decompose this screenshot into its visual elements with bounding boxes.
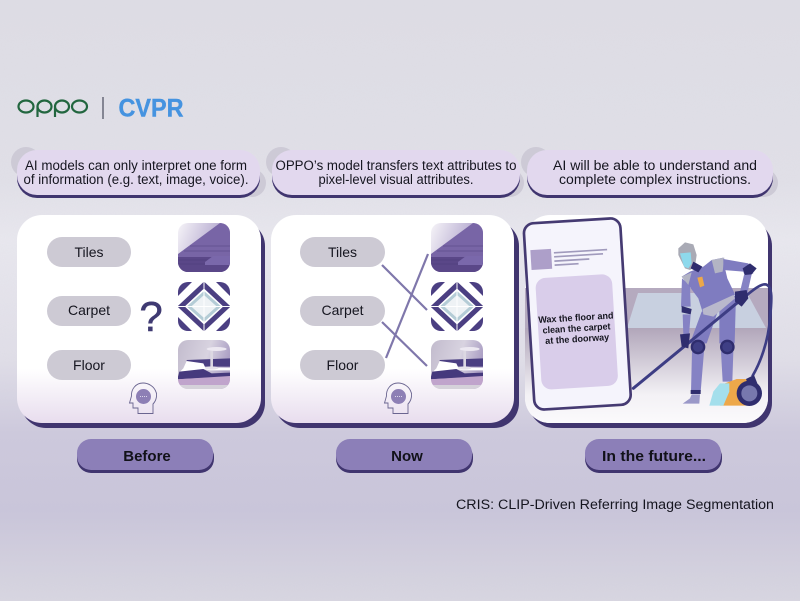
label: floor bbox=[47, 350, 131, 380]
caption pill: before: AI models can only interpret one form bbox=[25, 158, 247, 173]
button: now: Now bbox=[391, 448, 423, 465]
caption pill: now bbox=[266, 147, 524, 198]
label: floor: Floor bbox=[327, 357, 359, 373]
robot left arm bbox=[681, 278, 692, 335]
card bbox=[525, 215, 772, 428]
image: floor bbox=[430, 340, 483, 389]
label: carpet: Carpet bbox=[68, 302, 110, 318]
room scene bbox=[525, 288, 768, 423]
phone message card: clean the carpet bbox=[542, 321, 611, 335]
vacuum body bbox=[709, 375, 762, 406]
logo: OPPO and CVPR bbox=[18, 94, 184, 122]
image: floor bbox=[177, 340, 230, 389]
caption pill: future: AI will be able to understand and bbox=[553, 158, 757, 173]
robot torso bbox=[682, 258, 735, 314]
image: carpet bbox=[431, 282, 483, 331]
phone message card bbox=[535, 274, 618, 390]
caption pill: future: complete complex instructions. bbox=[559, 172, 751, 187]
caption pill: now: OPPO’s model transfers text attributes to bbox=[276, 158, 516, 173]
label: tiles: Tiles bbox=[328, 244, 357, 260]
label: carpet bbox=[300, 296, 385, 326]
robot with vacuum bbox=[633, 242, 771, 406]
label: carpet: Carpet bbox=[321, 302, 364, 318]
logo divider bbox=[102, 97, 104, 119]
button: before: Before bbox=[123, 448, 171, 465]
phone message card: at the doorway bbox=[545, 332, 610, 346]
card bbox=[271, 215, 519, 428]
button: in the future: In the future... bbox=[602, 448, 706, 465]
card bbox=[17, 215, 265, 428]
phone text lines bbox=[554, 249, 608, 266]
caption pill: before bbox=[11, 147, 266, 198]
label: floor: Floor bbox=[73, 357, 105, 373]
image: tiles bbox=[178, 223, 230, 272]
label: floor bbox=[300, 350, 385, 380]
label: carpet bbox=[47, 296, 131, 326]
button: now bbox=[336, 439, 473, 473]
panel: now bbox=[271, 215, 519, 428]
image: carpet bbox=[178, 282, 230, 331]
robot hands bbox=[680, 290, 748, 348]
button: in the future bbox=[585, 439, 722, 473]
label: tiles: Tiles bbox=[74, 244, 104, 260]
connector lines bbox=[382, 254, 428, 366]
panel: before bbox=[17, 215, 265, 428]
caption pill: now: pixel-level visual attributes. bbox=[318, 172, 474, 187]
robot right arm bbox=[723, 259, 757, 293]
question mark: ? bbox=[139, 293, 163, 340]
caption pill: before: of information (e.g. text, image, voice). bbox=[24, 172, 248, 187]
panel: in the future bbox=[523, 215, 772, 428]
phone avatar bbox=[530, 249, 552, 270]
label: tiles bbox=[47, 237, 131, 267]
phone body bbox=[523, 218, 631, 410]
phone message card: Wax the floor and bbox=[538, 310, 614, 325]
button: before bbox=[77, 439, 214, 473]
label: tiles bbox=[300, 237, 385, 267]
caption pill: future bbox=[521, 147, 778, 198]
icon: head with speech bubble bbox=[130, 383, 157, 414]
vacuum hose and pipe bbox=[633, 284, 771, 388]
phone with instruction bbox=[523, 218, 631, 410]
footnote: CRIS: CLIP-Driven Referring Image Segmentation bbox=[456, 497, 774, 512]
robot legs bbox=[683, 295, 736, 404]
logo: OPPO wordmark bbox=[18, 100, 87, 117]
logo: CVPR: CVPR bbox=[118, 94, 184, 122]
robot head bbox=[678, 242, 702, 272]
icon: head with speech bubble bbox=[384, 383, 412, 414]
image: tiles bbox=[431, 223, 483, 272]
